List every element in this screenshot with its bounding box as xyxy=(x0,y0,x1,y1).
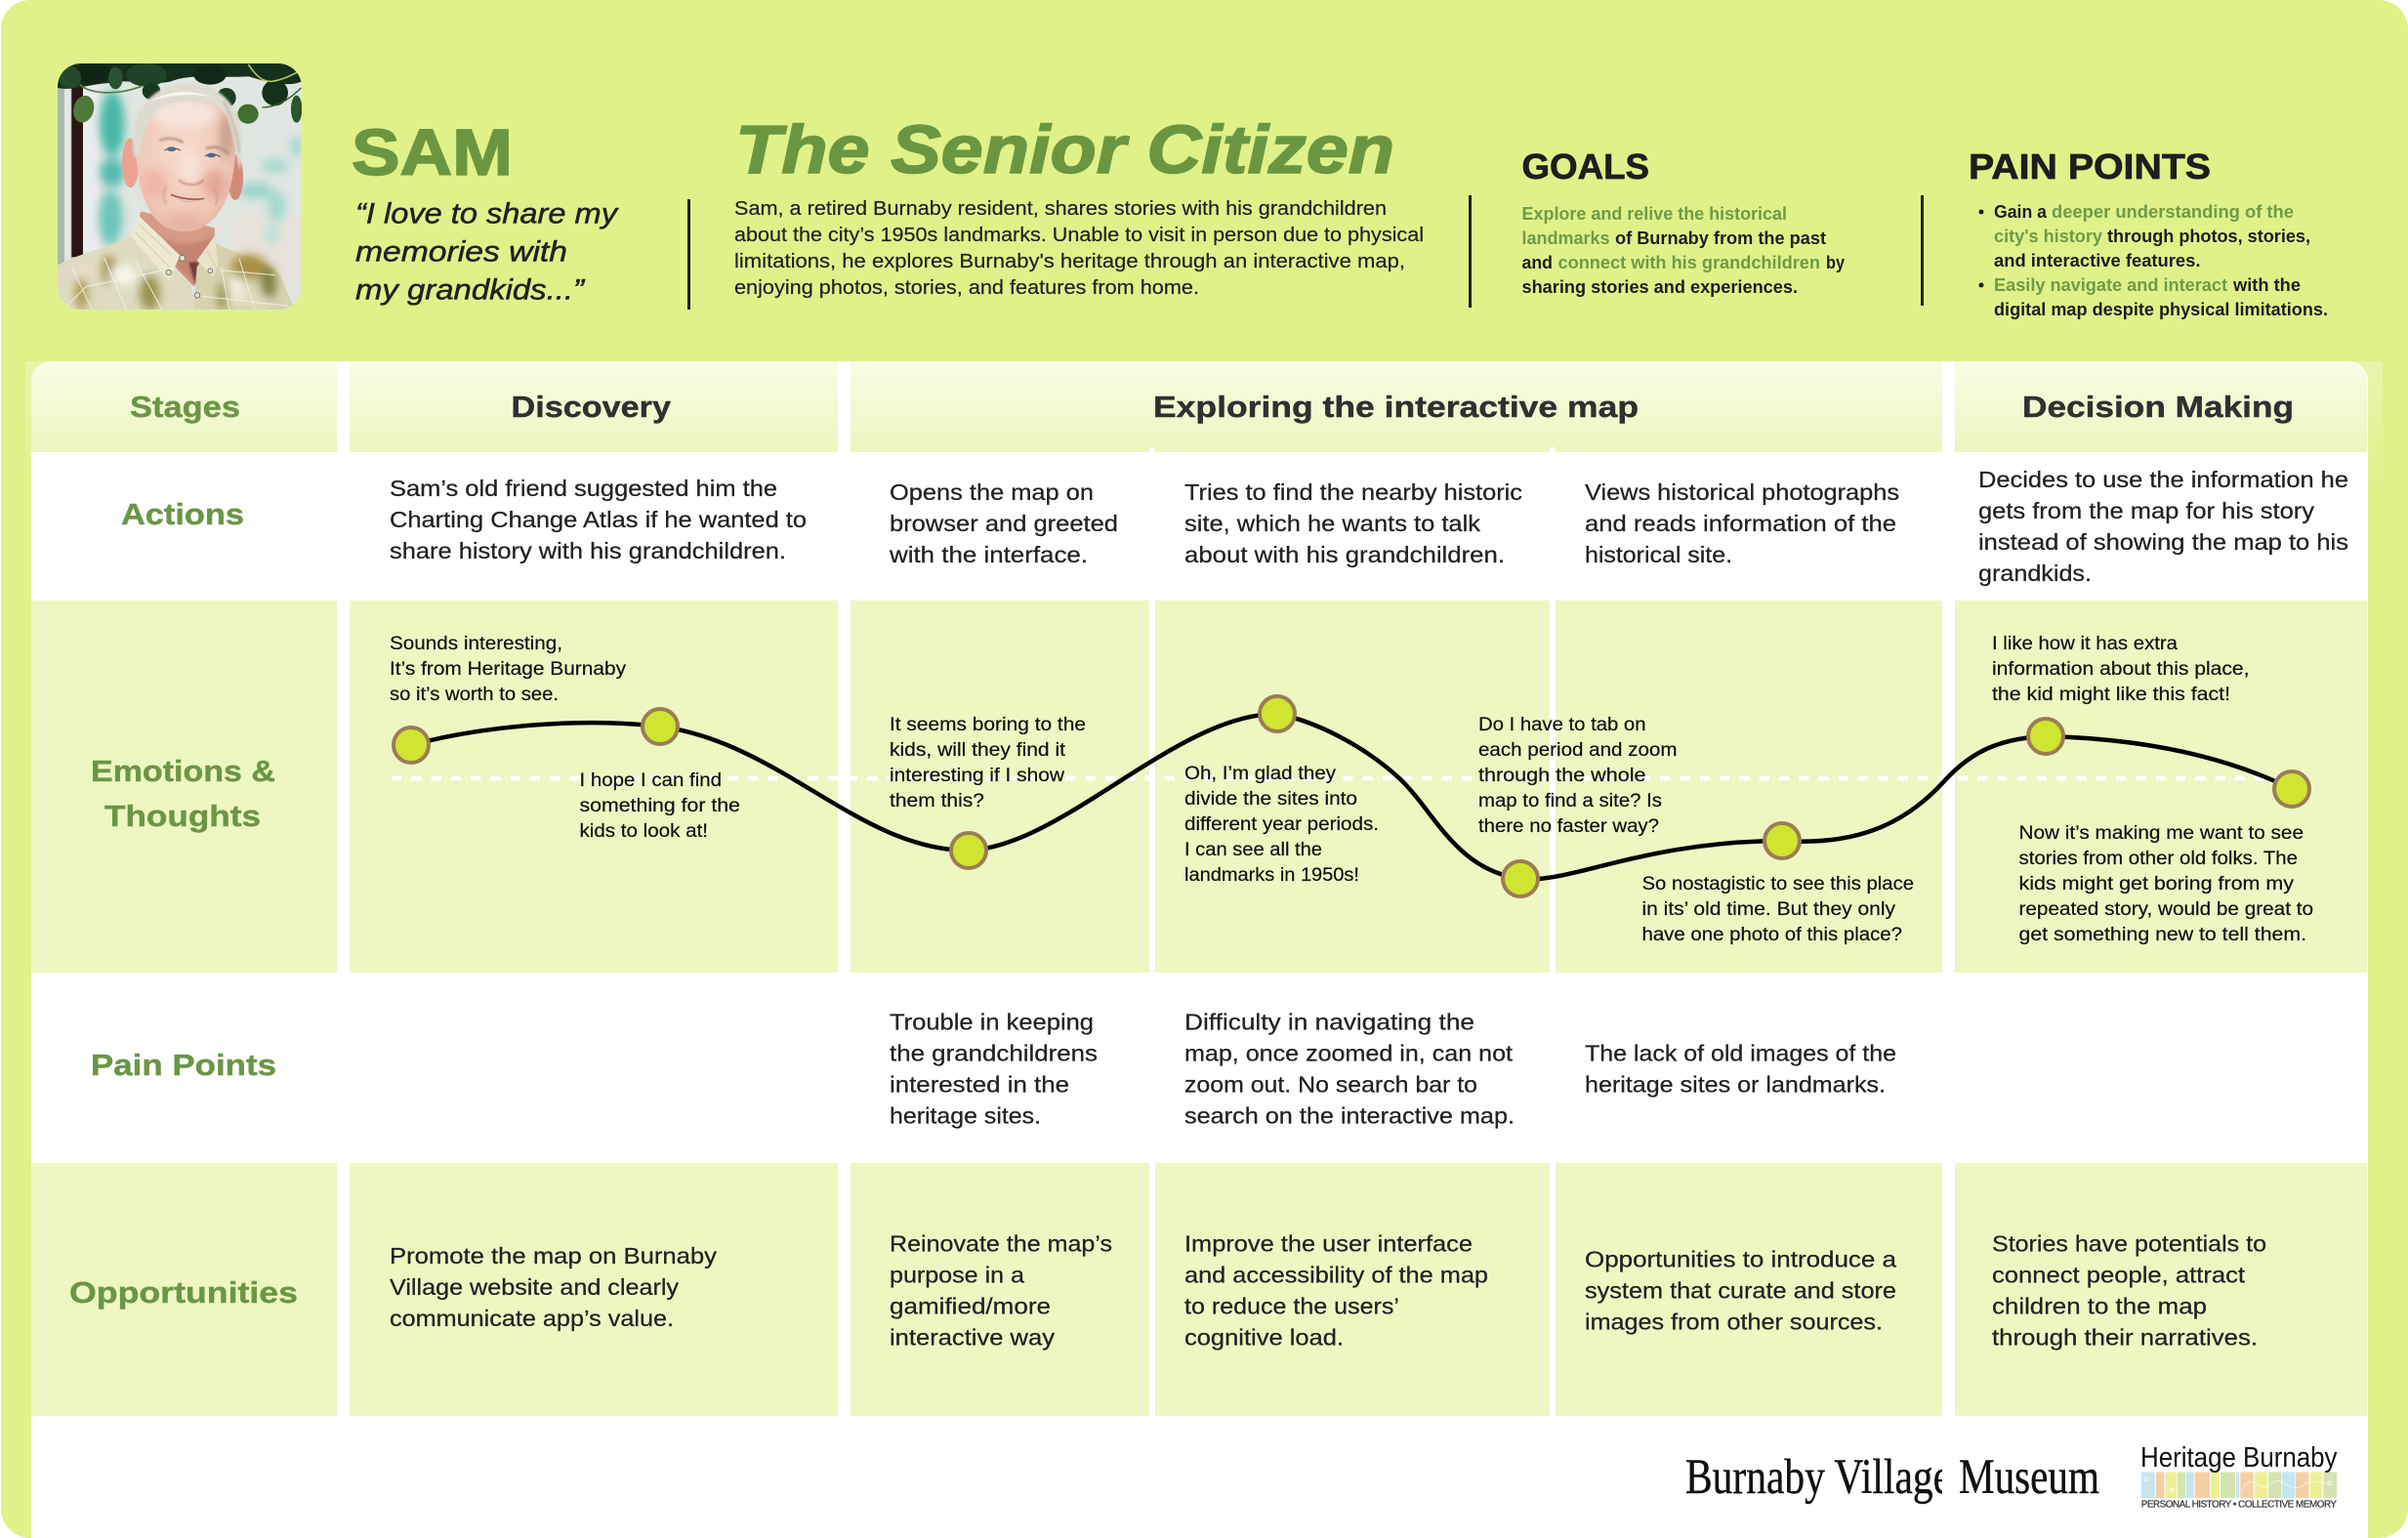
shirt xyxy=(58,235,197,312)
thought: nostalgic: have one photo of this place? xyxy=(1642,925,1902,945)
thought: other old folks: stories from other old folks. The xyxy=(2019,849,2298,869)
goals text xyxy=(1521,203,1846,297)
pain points list xyxy=(1978,201,2328,319)
pain points list: and interactive features. xyxy=(1994,250,2201,270)
persona description: limitations, he explores Burnaby's heritage through an interactive map, xyxy=(734,250,1405,272)
thought: glad xyxy=(1184,764,1379,886)
opportunities row text: cognitive load. xyxy=(1184,1324,1344,1350)
pain points row xyxy=(91,1010,1896,1129)
stages header row: Decision Making xyxy=(2022,390,2294,424)
persona description: about the city’s 1950s landmarks. Unable to visit in person due to physical xyxy=(734,224,1424,246)
thought: seems boring: interesting if I show xyxy=(890,766,1064,786)
thought: tab on each period: through the whole xyxy=(1478,766,1646,786)
pain points row: zoom out. No search bar to xyxy=(1184,1072,1477,1098)
opportunities row text: communicate app’s value. xyxy=(390,1306,674,1331)
goals text: by xyxy=(1826,252,1846,272)
thought: tab on each period: Do I have to tab on xyxy=(1478,715,1646,735)
opportunities row text: Village website and clearly xyxy=(390,1274,680,1300)
thought: glad: I can see all the xyxy=(1184,840,1322,860)
pain points list: with the xyxy=(2232,274,2301,295)
portrait photo of Sam xyxy=(54,59,308,315)
thought: I hope: something for the xyxy=(580,796,740,816)
thought: sounds interesting: It’s from Heritage Burnaby xyxy=(390,659,627,680)
opportunities row text: system that curate and store xyxy=(1585,1277,1896,1303)
persona quote: memories with xyxy=(355,236,567,268)
actions row: with the interface. xyxy=(889,542,1088,567)
opportunities row text: Reinovate the map’s xyxy=(890,1230,1112,1256)
thought: seems boring: kids, will they find it xyxy=(890,740,1066,761)
hair xyxy=(133,83,242,171)
table backing strip xyxy=(25,361,2383,488)
opportunities row text: images from other sources. xyxy=(1585,1309,1883,1334)
opportunities row text: Promote the map on Burnaby xyxy=(390,1243,718,1268)
thought: I hope xyxy=(580,770,740,842)
opportunities row panels xyxy=(31,1163,2367,1416)
opportunities row text: Opportunities xyxy=(69,1275,298,1309)
opportunities row text: purpose in a xyxy=(890,1262,1024,1287)
persona description: enjoying photos, stories, and features from home. xyxy=(734,276,1199,299)
logo: Burnaby Village Museum: Burnaby Village xyxy=(1685,1450,1951,1505)
face xyxy=(137,102,235,231)
actions row: grandkids. xyxy=(1978,561,2092,586)
pain points row: search on the interactive map. xyxy=(1184,1103,1515,1129)
goals text: connect with his grandchildren xyxy=(1558,252,1820,272)
pain points row: heritage sites or landmarks. xyxy=(1585,1072,1886,1098)
opportunities row text: Opportunities to introduce a xyxy=(1585,1246,1896,1271)
pain points row: Difficulty in navigating the xyxy=(1184,1010,1474,1035)
actions row: Tries to find the nearby historic xyxy=(1184,479,1522,505)
divider xyxy=(687,199,690,310)
goals text: landmarks xyxy=(1521,228,1609,248)
opportunities row text: children to the map xyxy=(1992,1293,2207,1318)
actions row: Opens the map on xyxy=(890,479,1094,505)
opportunities row text xyxy=(69,1230,2266,1350)
goals heading: GOALS xyxy=(1521,146,1649,187)
buttons xyxy=(166,255,213,298)
pain points list: through photos, stories, xyxy=(2107,226,2310,246)
pain points row: the grandchildrens xyxy=(890,1041,1098,1066)
emotions row label: Thoughts xyxy=(104,799,261,833)
actions row: share history with his grandchildren. xyxy=(390,538,786,563)
logo: Burnaby Village Museum: Museum xyxy=(1959,1450,2099,1505)
logo: Heritage Burnaby: PERSONAL HISTORY • COLLECTIVE MEMORY xyxy=(2141,1500,2337,1510)
thought: tab on each period: there no faster way? xyxy=(1478,816,1659,837)
logo: Heritage Burnaby: Heritage Burnaby xyxy=(2140,1442,2338,1474)
thought: tab on each period: map to find a site? Is xyxy=(1478,791,1662,811)
name heading: SAM xyxy=(352,116,513,189)
persona quote: “I love to share my xyxy=(355,197,619,230)
actions row: about with his grandchildren. xyxy=(1184,542,1505,567)
thought: glad: divide the sites into xyxy=(1184,789,1357,810)
pain points list: Easily navigate and interact xyxy=(1994,274,2227,295)
actions row: browser and greeted xyxy=(890,511,1118,536)
emotions row label xyxy=(91,754,275,833)
pain points list: deeper understanding of the xyxy=(2052,201,2294,222)
thought: I hope: kids to look at! xyxy=(580,821,708,842)
logo: Heritage Burnaby xyxy=(2140,1442,2338,1510)
neck xyxy=(139,212,215,286)
persona description: Sam, a retired Burnaby resident, shares stories with his grandchildren xyxy=(734,197,1387,220)
actions row: and reads information of the xyxy=(1585,511,1896,536)
actions row: Views historical photographs xyxy=(1585,479,1899,505)
pain points row: heritage sites. xyxy=(890,1103,1041,1129)
opportunities row text: and accessibility of the map xyxy=(1184,1262,1488,1287)
journey table body xyxy=(31,361,2368,1538)
thought: extra information: the kid might like this fact! xyxy=(1992,685,2230,705)
pain points row: map, once zoomed in, can not xyxy=(1184,1041,1514,1066)
thought: sounds interesting: Sounds interesting, xyxy=(390,634,562,654)
thought: I hope: I hope I can find xyxy=(580,770,722,791)
stages header row: Exploring the interactive map xyxy=(1153,390,1639,424)
pain points heading: PAIN POINTS xyxy=(1969,146,2211,187)
thought: other old folks: repeated story, would be great to xyxy=(2019,899,2313,920)
opportunities row text: gamified/more xyxy=(890,1293,1051,1318)
logo: Burnaby Village Museum xyxy=(1685,1445,2099,1514)
opportunities row text: connect people, attract xyxy=(1992,1262,2246,1287)
thought: glad: different year periods. xyxy=(1184,814,1379,835)
opportunities row text: Stories have potentials to xyxy=(1992,1230,2266,1256)
goals text: Explore and relive the historical xyxy=(1521,203,1787,224)
actions row: historical site. xyxy=(1585,542,1732,567)
thought: glad: landmarks in 1950s! xyxy=(1184,865,1359,886)
thought: seems boring xyxy=(890,715,1086,811)
pain points row: interested in the xyxy=(890,1072,1069,1098)
ears xyxy=(122,138,139,187)
foliage xyxy=(58,62,302,125)
thought: other old folks: kids might get boring from my xyxy=(2019,874,2295,894)
actions row: Actions xyxy=(121,497,244,531)
nose and mouth xyxy=(179,180,203,185)
thought: sounds interesting: so it’s worth to see. xyxy=(390,685,559,705)
persona description xyxy=(734,197,1424,299)
pain points list: city's history xyxy=(1994,226,2103,246)
stages header row xyxy=(31,361,2367,452)
actions row: Decides to use the information he xyxy=(1978,467,2348,492)
divider xyxy=(1921,195,1924,306)
divider xyxy=(1469,195,1472,308)
thought: sounds interesting xyxy=(390,634,627,705)
thought: glad: Oh, I’m glad they xyxy=(1184,764,1337,784)
goals text: and xyxy=(1521,252,1553,272)
stages header row: Stages xyxy=(130,390,240,424)
opportunities row text: to reduce the users’ xyxy=(1184,1293,1399,1318)
thought: seems boring: them this? xyxy=(890,791,984,811)
opportunities row text: through their narratives. xyxy=(1992,1324,2258,1350)
thought: nostalgic: So nostagistic to see this place xyxy=(1642,874,1914,894)
thought: tab on each period: each period and zoom xyxy=(1478,740,1678,761)
thought: nostalgic: in its’ old time. But they only xyxy=(1642,899,1896,920)
thought: other old folks: Now it’s making me want to see xyxy=(2019,823,2304,844)
thought: seems boring: It seems boring to the xyxy=(890,715,1086,735)
goals text: sharing stories and experiences. xyxy=(1521,276,1798,297)
thought: other old folks: get something new to tell them. xyxy=(2019,925,2306,945)
collar xyxy=(131,216,180,280)
pain points row: Trouble in keeping xyxy=(890,1010,1094,1035)
opportunities row text: Improve the user interface xyxy=(1184,1230,1473,1256)
thought: extra information xyxy=(1992,634,2250,705)
thought: extra information: I like how it has extra xyxy=(1992,634,2178,654)
emotions row label: Emotions & xyxy=(91,754,275,788)
opportunities row text: interactive way xyxy=(890,1324,1056,1350)
actions row: site, which he wants to talk xyxy=(1184,511,1481,536)
thought: tab on each period xyxy=(1478,715,1678,837)
actions row: gets from the map for his story xyxy=(1978,498,2315,523)
emotions row panels xyxy=(31,601,2367,973)
actions row xyxy=(121,467,2348,586)
eyes and brows xyxy=(159,139,228,153)
thought: extra information: information about this place, xyxy=(1992,659,2250,680)
emotion curve xyxy=(411,714,2292,879)
actions row: Charting Change Atlas if he wanted to xyxy=(390,507,807,532)
persona title: The Senior Citizen xyxy=(735,111,1394,187)
emotion markers xyxy=(394,696,2309,896)
pain points row: Pain Points xyxy=(91,1048,276,1082)
persona quote xyxy=(355,197,619,307)
persona quote: my grandkids...” xyxy=(355,273,586,307)
pain points list: digital map despite physical limitations. xyxy=(1994,299,2328,319)
thought: nostalgic xyxy=(1642,874,1914,945)
thought: other old folks xyxy=(2019,823,2313,945)
pain points row: The lack of old images of the xyxy=(1585,1041,1896,1066)
pain points list: Gain a xyxy=(1994,201,2048,222)
actions row: instead of showing the map to his xyxy=(1978,529,2348,555)
stages header row: Discovery xyxy=(512,390,672,424)
goals text: of Burnaby from the past xyxy=(1615,228,1826,248)
neutral baseline dashes xyxy=(392,775,2309,781)
actions row: Sam’s old friend suggested him the xyxy=(390,476,777,501)
